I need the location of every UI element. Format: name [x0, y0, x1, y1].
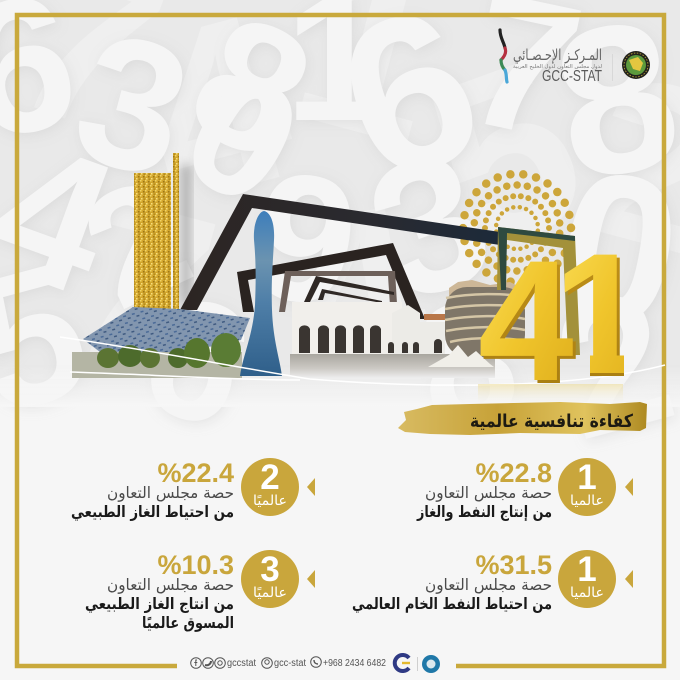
second steel frame [237, 243, 425, 319]
round tiered building [445, 280, 525, 357]
white sweep lines [60, 337, 665, 385]
reflecting floor [290, 354, 495, 378]
stat: marketed natural gas production: المسوق عالميًا [142, 614, 234, 632]
logo: GCC-STAT wordmark: GCC-STAT [542, 68, 602, 85]
stat: oil and gas production: 1 [577, 458, 597, 497]
stat: marketed natural gas production: 3 [260, 550, 280, 589]
background numerals: 2 [58, 142, 214, 342]
41 reflection [478, 384, 623, 406]
background numerals: 6 [120, 256, 274, 466]
white arched building [292, 302, 447, 355]
stat: crude oil reserves: حصة مجلس التعاون [425, 576, 552, 595]
stat: marketed natural gas production: حصة مجلس التعاون [107, 576, 234, 595]
logo: ribbon [500, 30, 507, 82]
stat: marketed natural gas production: %10.3 [157, 550, 234, 580]
golden frame landmark [497, 227, 580, 355]
gold glitter tower [134, 153, 191, 309]
gold brush banner [398, 402, 647, 435]
gold dot sunburst [463, 174, 571, 282]
gold number 41: 4 [481, 228, 577, 420]
background numerals: 0 [154, 32, 331, 244]
stat: crude oil reserves: عالميا [570, 585, 604, 601]
footer: handles and phone [227, 658, 386, 669]
stat: natural gas reserves: من احتياط الغاز الطبيعي [71, 503, 234, 522]
background numerals: 9 [238, 132, 372, 347]
stat: crude oil reserves: 1 [577, 550, 597, 589]
stat: oil and gas production: من إنتاج النفط والغاز [416, 503, 552, 521]
footer: handles and phone: gcc-stat [274, 658, 306, 669]
stat: oil and gas production [416, 458, 633, 521]
gold number 41: 1 [553, 218, 649, 410]
stat: crude oil reserves [352, 550, 633, 614]
background numerals: 3 [344, 108, 516, 343]
stat: natural gas reserves: عالميًا [253, 493, 287, 509]
logo: GCC emblem [622, 51, 650, 79]
gold number 41 [480, 254, 624, 383]
gold number 41: 1 [556, 221, 652, 413]
logo: GCC-STAT wordmark [513, 46, 603, 85]
stat: crude oil reserves: من احتياط النفط الخام العالمي [352, 595, 552, 614]
footer: handles and phone: gccstat [227, 658, 256, 669]
stat: oil and gas production: %22.8 [475, 458, 552, 488]
blue tower [240, 211, 282, 376]
stat: oil and gas production: عالميا [570, 493, 604, 509]
third steel frame [279, 271, 398, 320]
stat: marketed natural gas production [85, 550, 315, 632]
stat: natural gas reserves [71, 458, 315, 522]
perforated mesh building [83, 307, 250, 355]
background numerals [0, 0, 680, 480]
logo separator [612, 54, 613, 81]
stat: marketed natural gas production: عالميًا [253, 585, 287, 601]
large dark steel frame [180, 194, 500, 310]
stat: marketed natural gas production: من انتاج الغاز الطبيعي [85, 595, 234, 614]
logo: GCC-STAT wordmark: المـركـز الإحـصـائي [513, 46, 602, 65]
footer: divider [417, 657, 418, 671]
footer: social media icons [191, 657, 321, 668]
footer: partner logo [395, 655, 410, 671]
footer: certification badge [422, 655, 440, 673]
white tent canopy [428, 345, 494, 367]
footer: handles and phone: +968 2434 6482 [323, 658, 386, 669]
stat: natural gas reserves: 2 [260, 458, 280, 497]
stat: natural gas reserves: %22.4 [157, 458, 234, 488]
banner title: كفاءة تنافسية عالمية [470, 411, 633, 432]
trees and ground [72, 333, 242, 378]
gold number 41: 4 [478, 225, 574, 417]
background numerals: 8 [405, 261, 531, 464]
stat: crude oil reserves: %31.5 [475, 550, 552, 580]
logo: GCC-STAT wordmark: لدول مجلس التعاون لدول الخليج العربية [513, 64, 603, 70]
stat: natural gas reserves: حصة مجلس التعاون [107, 484, 234, 503]
background numerals: 4 [267, 152, 445, 439]
background numerals: 7 [41, 142, 239, 436]
background numerals: 5 [397, 6, 614, 304]
stat: oil and gas production: حصة مجلس التعاون [425, 484, 552, 503]
